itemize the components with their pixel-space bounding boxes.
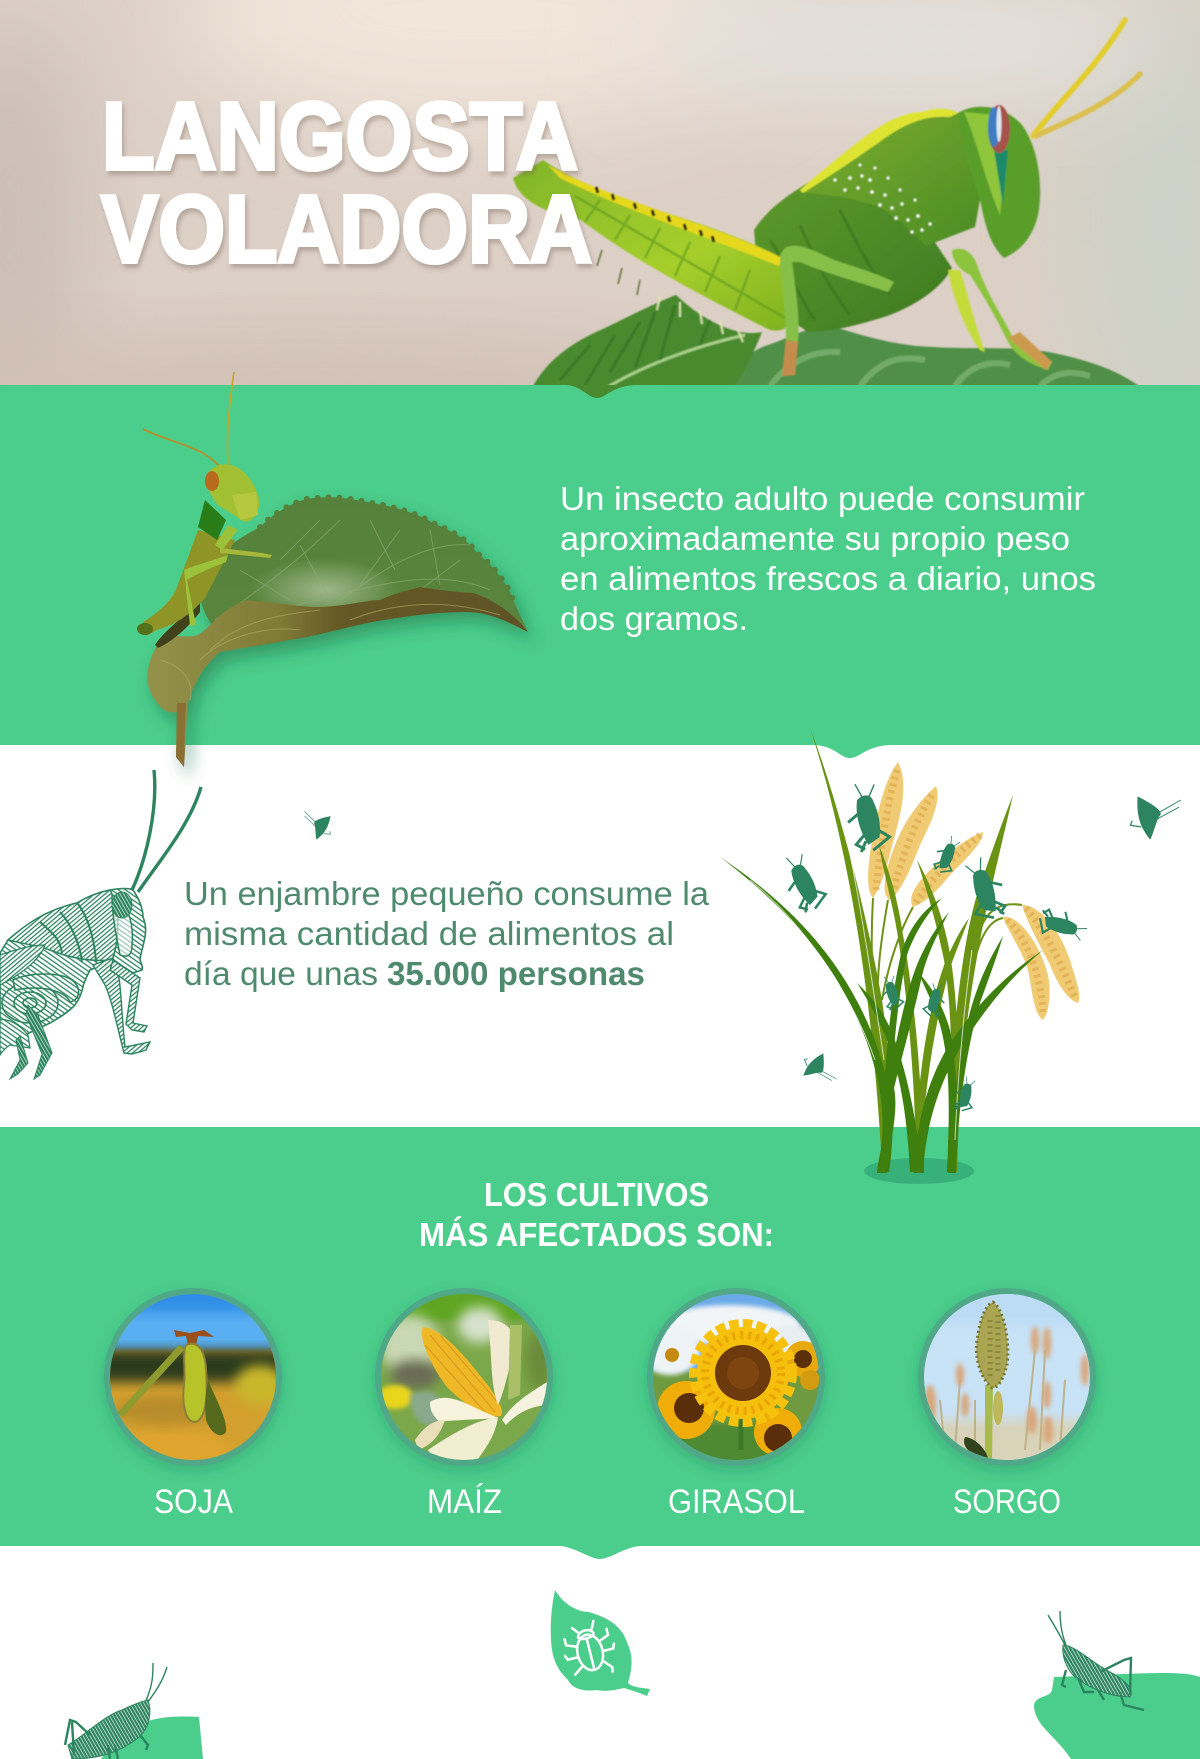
illustration: right locust on leaf [1034, 1611, 1200, 1759]
text block: adult consumption [560, 480, 1096, 637]
stems [872, 898, 1022, 1050]
hero notch [566, 385, 635, 398]
title: LANGOSTA [102, 83, 578, 190]
illustration: rice plant [720, 728, 1090, 1184]
antennae [1033, 20, 1125, 136]
text block: swarm comparison [184, 875, 710, 992]
text block: adult consumption: aproximadamente su propio peso [560, 520, 1070, 557]
icon: flying locust right [1130, 796, 1181, 840]
blades [810, 728, 1013, 1172]
locusts on plant [777, 780, 1090, 1113]
heading: crops: LOS CULTIVOS [484, 1176, 709, 1213]
crop: maiz [375, 1285, 555, 1470]
panel: green crops band [0, 1127, 1200, 1559]
heading: crops: MÁS AFECTADOS SON: [419, 1216, 774, 1253]
label: girasol: GIRASOL [668, 1483, 805, 1521]
hero banner [0, 0, 1200, 385]
pronotum [800, 109, 980, 246]
insect photo [513, 20, 1142, 400]
illustration: left locust on leaf [65, 1663, 203, 1759]
title: VOLADORA [101, 176, 592, 283]
hind femur [513, 160, 790, 331]
crop: soja [102, 1288, 284, 1474]
illustration: insect on leaf [137, 372, 528, 767]
band notch [815, 745, 890, 758]
small insect [137, 372, 272, 648]
icon: flying locust left [796, 1049, 839, 1093]
head and eye [958, 107, 1040, 258]
panel: green consumption band [0, 385, 1200, 745]
text block: adult consumption: Un insecto adulto puede consumir [560, 480, 1085, 517]
label: sorgo: SORGO [953, 1483, 1061, 1521]
crop: sorgo [915, 1285, 1100, 1475]
label: maiz: MAÍZ [427, 1483, 502, 1521]
icon: flying locust small [298, 809, 335, 843]
text block: swarm comparison: misma cantidad de alimentos al [184, 915, 674, 952]
text block: swarm comparison: 35.000 personas [387, 955, 645, 992]
panel: white swarm band [0, 745, 1200, 1127]
crop: girasol [640, 1285, 830, 1470]
text block: swarm comparison: Un enjambre pequeño consume la [184, 875, 710, 912]
illustration: engraved grasshopper [0, 770, 201, 1079]
heading: crops [419, 1176, 774, 1253]
text block: adult consumption: en alimentos frescos a diario, unos [560, 560, 1096, 597]
abdomen and thorax [754, 170, 952, 332]
label: soja: SOJA [154, 1483, 233, 1521]
title [101, 83, 592, 283]
underside fold [147, 587, 528, 767]
grain heads [868, 762, 1079, 1020]
leaf under the insect [734, 327, 1142, 388]
legs [780, 246, 894, 342]
icon: leaf with beetle [551, 1590, 650, 1696]
text block: swarm comparison: día que unas [184, 955, 378, 992]
lower hind leg [532, 294, 763, 385]
text block: adult consumption: dos gramos. [560, 600, 748, 637]
